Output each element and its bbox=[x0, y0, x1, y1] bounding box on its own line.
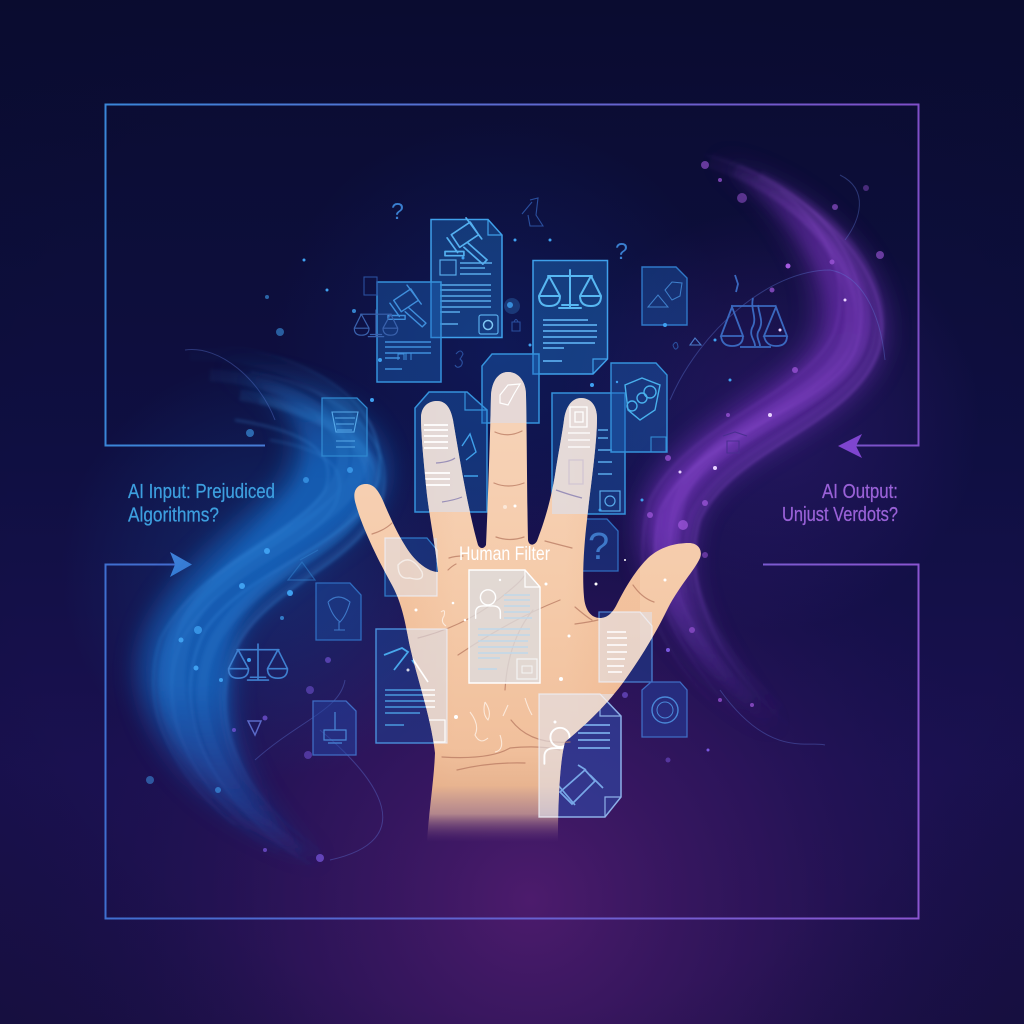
label: AI input: AI Input: Prejudiced bbox=[128, 481, 275, 503]
particle dots: lower violet bbox=[232, 648, 710, 862]
document: map file bbox=[642, 267, 687, 325]
document: palm profile overlay bbox=[469, 570, 540, 683]
document outlines above the hand bbox=[376, 538, 652, 817]
label: AI output: Unjust Verdots? bbox=[782, 504, 898, 526]
left lower overlay bbox=[406, 629, 447, 743]
icon: broken balance scale bbox=[721, 275, 787, 347]
icon: small scale bbox=[354, 310, 398, 337]
label: AI input: Algorithms? bbox=[128, 504, 219, 526]
flowing connector curves bbox=[185, 175, 885, 860]
label: human filter: Human Filter bbox=[459, 544, 551, 565]
document: ring finger file bbox=[415, 392, 487, 512]
small floating icons bbox=[364, 198, 747, 453]
document: checklist file bbox=[322, 398, 367, 456]
icon: triangle outline bbox=[248, 721, 261, 735]
human hand bbox=[354, 372, 701, 842]
index finger overlay bbox=[552, 398, 597, 514]
frame: top bracket with input and output ends bbox=[106, 104, 918, 446]
document: lower left person file bbox=[376, 629, 447, 743]
document: ring icon file bbox=[642, 682, 687, 737]
faint palm glyph doodles bbox=[441, 611, 532, 752]
label: AI output: AI Output: bbox=[822, 481, 898, 503]
document: network file bbox=[611, 363, 667, 452]
document: creature file bbox=[316, 583, 361, 640]
document: question file bbox=[580, 519, 618, 571]
purple data stream wave bbox=[640, 155, 886, 740]
document: index finger file bbox=[552, 393, 625, 514]
icon: question mark right: ? bbox=[615, 238, 628, 264]
particle dots: purple bbox=[647, 161, 884, 707]
bottom person overlay bbox=[539, 694, 621, 817]
translucent document overlays on the hand bbox=[376, 354, 652, 817]
document: pinky file bbox=[385, 538, 437, 596]
document: hammer file bbox=[377, 282, 441, 382]
frame: bottom bracket bbox=[106, 564, 918, 918]
palm creases bbox=[372, 431, 654, 770]
icon: mountain in wave bbox=[288, 550, 318, 580]
pinky overlay bbox=[385, 538, 437, 596]
icon: scale lower left bbox=[229, 644, 287, 680]
ring finger overlay bbox=[421, 401, 470, 512]
document: gavel file bbox=[431, 218, 502, 338]
icon: question mark left: ? bbox=[391, 198, 404, 224]
document: question file: ? bbox=[588, 526, 609, 568]
document: middle finger file bbox=[482, 354, 539, 423]
thumb side overlay bbox=[599, 612, 652, 682]
arrow: input pointing right bbox=[170, 552, 192, 577]
blue data stream wave bbox=[138, 345, 387, 865]
sparkle dots on the hand bbox=[406, 504, 666, 724]
middle finger overlay bbox=[490, 372, 526, 423]
document: thumb side file bbox=[599, 612, 652, 682]
document: stamp file bbox=[313, 701, 356, 755]
document: balance scale file bbox=[533, 260, 608, 374]
particle dots: blue bbox=[146, 238, 732, 793]
arrow: output pointing left bbox=[838, 434, 862, 458]
document: bottom person file bbox=[539, 694, 621, 817]
